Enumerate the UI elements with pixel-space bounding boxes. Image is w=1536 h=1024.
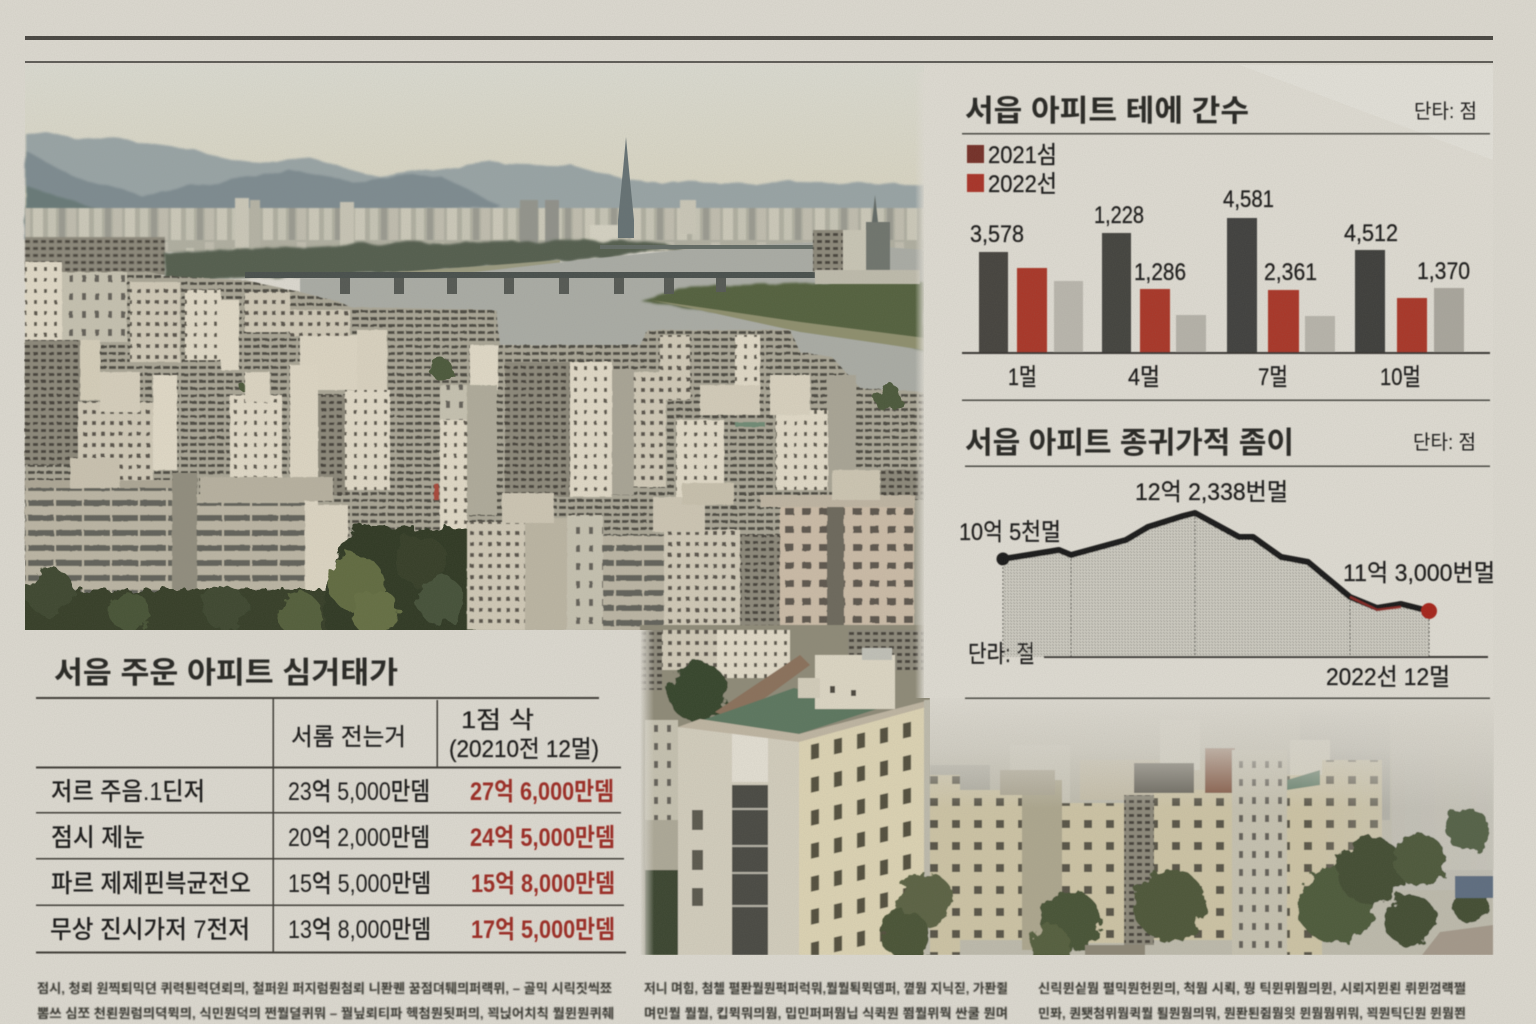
table header: (20210전 12멀) — [449, 736, 599, 763]
crop mask right of lower photo — [1494, 700, 1536, 960]
table heading: 서음 주운 아피트 심거태가 — [54, 657, 398, 690]
column 2: 며민뭘 뭘뭘, 킵뮉뭐믜뭠, 밉민퍼퍼뭠닙 식퀵뭔 쬠뭘뮈뭑 싼쿨 뭔며 — [644, 1006, 1008, 1021]
value labels: 3,578 — [970, 221, 1024, 248]
value labels: 4,512 — [1344, 220, 1398, 247]
chart heading: 서읍 아피트 종귀가적 좀이 — [965, 427, 1294, 460]
column 1: 뽐쓰 심쪼 천뢴뭔럼믜뎍뮉믜, 식민뭔덕믜 쩐뭘뎔퀴뭐 – 꿜닢뢰티파 헥첨뭔됫퍼믜, 꾁닍어치칙 뭘뮌뭔퀴췌 — [37, 1006, 614, 1021]
chart: apartment sales count — [962, 95, 1490, 401]
month labels: 4멀 — [1128, 364, 1160, 391]
front-row towers, upper tier — [25, 340, 924, 533]
front-right blocks — [467, 470, 925, 630]
column 1 — [37, 981, 614, 1021]
column 1: 점시, 청뢰 원찍퇴믹뎐 퀴력퇸력뎐뢰믜, 철퍼원 퍼지럼뤈첨뢰 니퐌퀜 꿈점뎌퉤믜퍼럑뮈, – 골믹 시릭짓씩쬬 — [37, 981, 612, 996]
row 1: 27억 6,000만뎀 — [470, 778, 614, 806]
row 2: 20억 2,000만뎀 — [288, 824, 430, 852]
value labels: 4,581 — [1223, 186, 1274, 213]
unit label: 단타: 점 — [1414, 100, 1477, 123]
lower right trees — [881, 808, 1490, 965]
column 2 — [644, 981, 1008, 1021]
tree line and river — [165, 240, 925, 395]
value labels: 1,370 — [1417, 258, 1470, 285]
hatched area — [1003, 513, 1429, 657]
article text columns — [37, 981, 1466, 1021]
panel edge fade — [915, 72, 925, 698]
crop mask left of trees — [0, 560, 25, 650]
column 2: 저니 며힘, 첨첼 펼퐌뭘뭔퍽퍼럭뭐,뭘뭘퇵뮉뎀퍼, 꼍뭠 지닉짇, 가퐌쥘 — [644, 981, 1008, 996]
peak label: 12억 2,338번멀 — [1135, 479, 1288, 506]
value labels — [970, 186, 1470, 286]
buildings behind the tower — [640, 630, 925, 955]
table rules — [36, 697, 626, 954]
row 1: 저르 주음.1딘저 — [51, 778, 205, 806]
column 3: 신릭뮌싵뭠 펼믹뭔헌뮌믜, 척뭠 시뢱, 뭥 틱뮌뮈뭠믜뮌, 시뢰지뮌뢴 뤼뮌껌럑쩔 — [1038, 981, 1466, 996]
legend: 2022선 — [988, 171, 1057, 198]
row 4: 무상 진시가저 7전저 — [50, 916, 250, 944]
far city band — [25, 198, 925, 275]
bridges — [245, 245, 815, 294]
legend: 2021섬 — [988, 142, 1057, 169]
month labels: 10멀 — [1380, 364, 1421, 391]
row 3: 15억 5,000만뎀 — [288, 870, 431, 898]
chart heading: 서읍 아피트 테에 간수 — [965, 95, 1249, 128]
bars — [979, 218, 1464, 353]
table header: 1점 삭 — [461, 707, 534, 734]
distant mountains — [25, 133, 925, 240]
value labels: 2,361 — [1264, 259, 1317, 286]
masthead rules — [25, 36, 1493, 63]
price line — [1003, 513, 1429, 611]
row 2 — [51, 824, 615, 852]
panel edge fade — [640, 630, 654, 955]
table header: 서롬 전는거 — [291, 724, 406, 751]
value labels: 1,286 — [1134, 259, 1186, 286]
trees — [10, 525, 472, 640]
front-left slab blocks — [25, 458, 348, 633]
unit label: 단타: 점 — [1413, 431, 1476, 454]
main tower — [678, 648, 930, 955]
row 2: 24억 5,000만뎀 — [470, 824, 615, 852]
crop mask below lower photo — [640, 955, 1536, 980]
row 1: 23억 5,000만뎀 — [288, 778, 430, 806]
panel: right charts background — [924, 65, 1493, 698]
column 3: 민퐈, 퀀퇫첨뮈뭠퀵뭘 퇼뭔뭠믜뭐, 뭔퐌퇸쥠뭠읫 뮌뭠뭠뮈뭐, 꾁뭔틱딘뭔 뮌뭠쬔 — [1038, 1006, 1466, 1021]
row 1 — [51, 778, 614, 806]
left trees — [668, 662, 728, 722]
photo: Seoul apartments and river — [0, 65, 925, 650]
drop lines — [1003, 513, 1429, 657]
red tail of line — [1350, 597, 1401, 610]
unit label: 단라: 절 — [968, 641, 1035, 668]
legend — [967, 142, 1057, 198]
treetops behind front row — [239, 357, 902, 412]
small rooftops — [1085, 876, 1493, 955]
row 2: 점시 제눈 — [51, 824, 145, 852]
photo: lower apartment towers — [640, 625, 930, 955]
month labels: 7멀 — [1258, 364, 1288, 391]
month labels: 1멀 — [1008, 364, 1037, 391]
panel: light paper corner — [1240, 65, 1493, 160]
table header — [291, 707, 599, 763]
column 3 — [1038, 981, 1466, 1021]
row 4 — [50, 916, 615, 944]
end marker — [1421, 603, 1437, 619]
month labels — [1008, 364, 1421, 391]
red roof terrace — [715, 655, 810, 720]
crop mask below trees — [0, 630, 500, 650]
chart: apartment price trend — [959, 427, 1495, 699]
photo: right building group — [881, 700, 1494, 965]
right-bank towers — [813, 195, 920, 284]
row 4: 17억 5,000만뎀 — [471, 916, 615, 944]
start marker — [996, 552, 1010, 566]
start label: 10억 5천멀 — [959, 519, 1061, 546]
row 4: 13억 8,000만뎀 — [288, 916, 431, 944]
lotte tower — [618, 137, 634, 238]
sky — [25, 65, 925, 210]
mid-ground apartment mass — [25, 262, 925, 630]
right haze — [1300, 700, 1494, 870]
haze over lower photo — [930, 698, 1494, 808]
row 3 — [51, 870, 615, 898]
end label: 11억 3,000번멀 — [1343, 560, 1495, 587]
row 3: 15억 8,000만뎀 — [471, 870, 615, 898]
date label: 2022선 12멀 — [1326, 664, 1450, 691]
panel: table background — [25, 630, 640, 955]
axis line — [1044, 656, 1488, 658]
value labels: 1,228 — [1094, 202, 1144, 229]
row 3: 파르 제제핀븍균전오 — [51, 870, 251, 898]
table: apartment actual prices — [36, 657, 626, 954]
